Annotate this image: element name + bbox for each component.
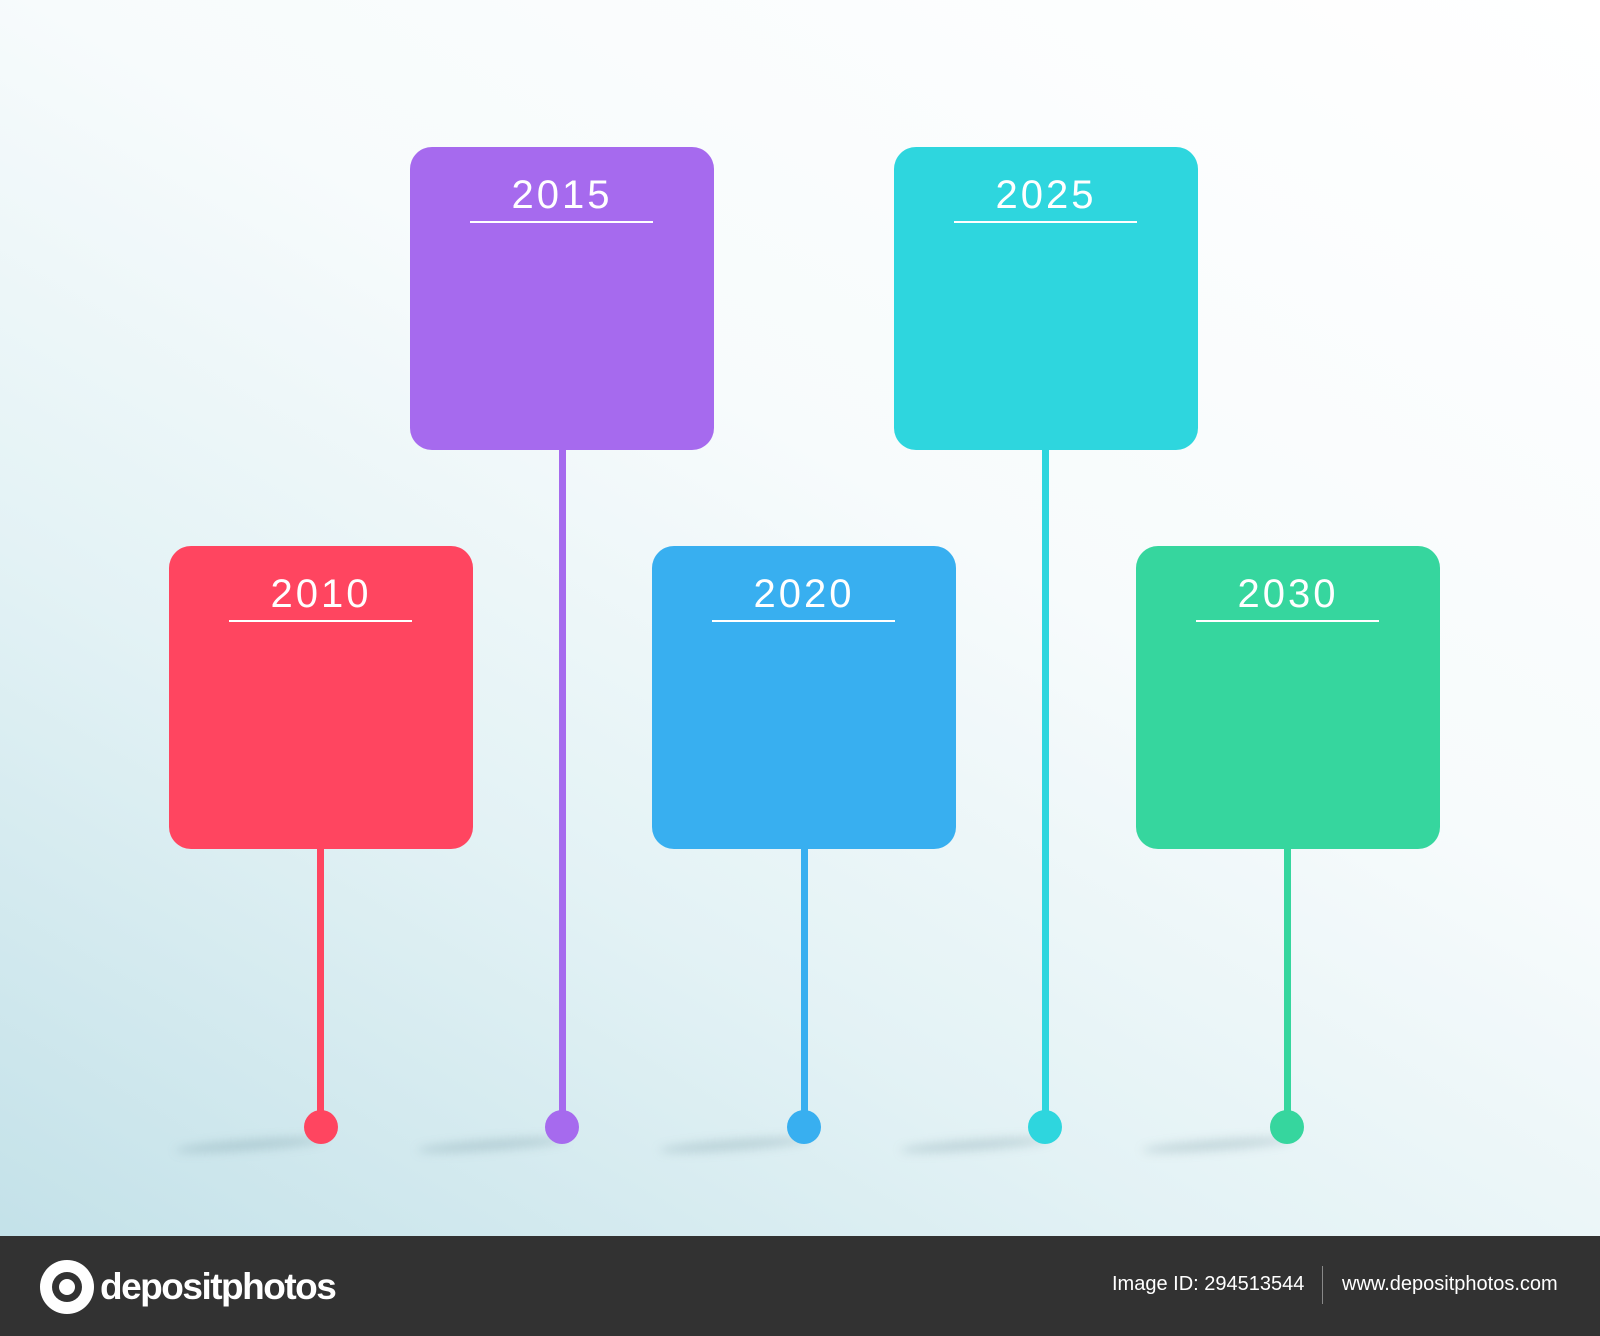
dot: 2025 [1028,1110,1062,1144]
stem: 2015 [559,445,566,1130]
card: 2010 [169,546,473,849]
shadow: 2030 [1142,1135,1292,1155]
year label 2010: 2010 [270,572,371,616]
year label 2020: 2020 [754,572,854,616]
stem: 2030 [1284,840,1291,1130]
image id text: Image ID: 294513544 [1112,1273,1304,1295]
card: 2025 [894,147,1198,450]
icon: camera [40,1260,94,1314]
dot: 2020 [787,1110,821,1144]
shadow: 2025 [900,1135,1050,1155]
card: 2020 [652,546,956,849]
card: 2015 [410,147,714,450]
card: 2030 [1136,546,1440,849]
logo [40,1260,336,1314]
stem: 2010 [317,840,324,1130]
footer bar [0,1236,1600,1336]
dot: 2010 [304,1110,338,1144]
website text: www.depositphotos.com [1342,1273,1558,1295]
stem: 2020 [801,840,808,1130]
year label 2025: 2025 [996,173,1096,217]
logo: depositphotos [100,1266,335,1307]
dot: 2015 [545,1110,579,1144]
shadow: 2020 [659,1135,809,1155]
year label 2030: 2030 [1238,572,1338,616]
stem: 2025 [1042,445,1049,1130]
year label 2015: 2015 [512,173,612,217]
dot: 2030 [1270,1110,1304,1144]
shadow: 2015 [417,1135,567,1155]
shadow: 2010 [175,1135,325,1155]
